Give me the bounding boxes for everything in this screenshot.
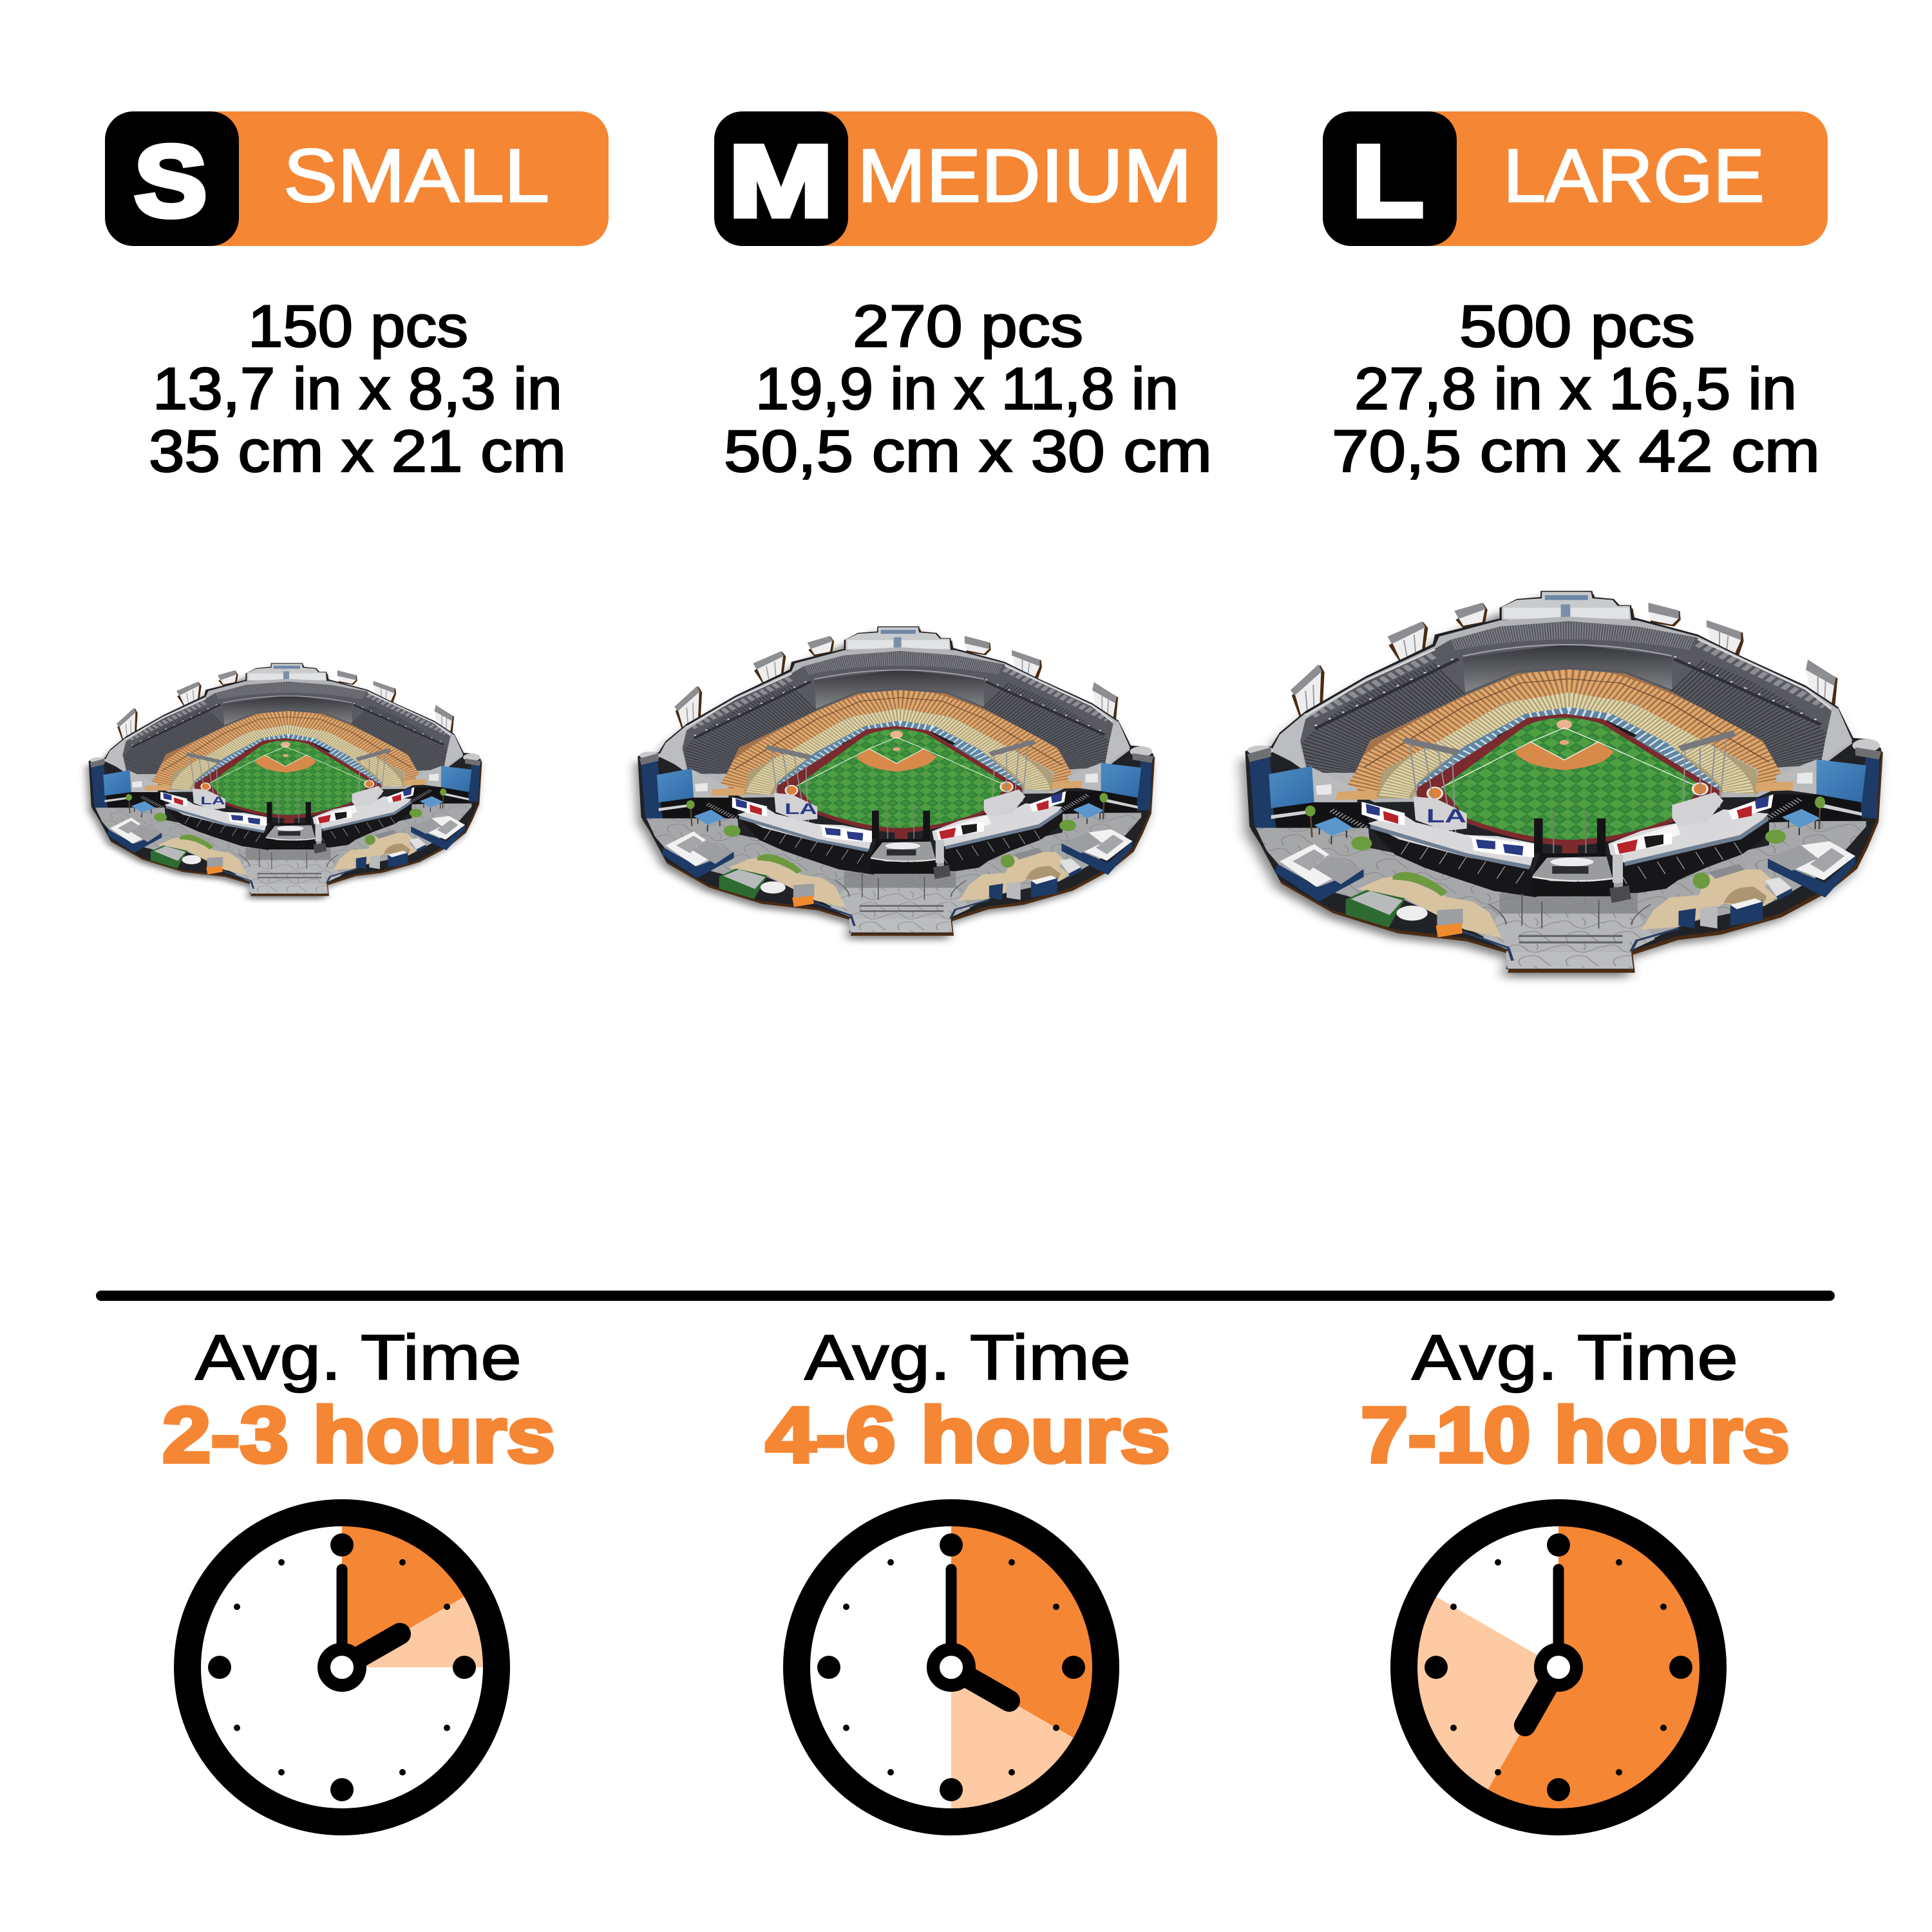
specifications: small: 150 pcs [248, 294, 468, 359]
average time: medium [766, 1321, 1170, 1479]
specifications: small [149, 294, 566, 484]
size badge: medium [714, 111, 1217, 246]
clock: 7-10 hours [1404, 1513, 1713, 1822]
specifications: medium: 19,9 in x 11,8 in [755, 356, 1179, 422]
specifications: large: 70,5 cm x 42 cm [1332, 419, 1820, 484]
specifications: medium [724, 294, 1212, 484]
badge label LARGE: LARGE [1503, 133, 1765, 218]
average time: large [1361, 1321, 1790, 1479]
duration: 7-10 hours: 7-10 hours [1361, 1391, 1790, 1479]
duration: 2-3 hours: 2-3 hours [162, 1391, 555, 1479]
badge label MEDIUM: MEDIUM [857, 133, 1192, 218]
specifications: large: 27,8 in x 16,5 in [1354, 356, 1797, 422]
badge letter M: M [729, 126, 833, 238]
average time: small: Avg. Time [195, 1321, 522, 1393]
stadium puzzle: large [1242, 591, 1883, 978]
clock: 2-3 hours [187, 1513, 497, 1822]
size badge: small [105, 111, 609, 246]
specifications: large [1332, 294, 1820, 484]
clock: 4-6 hours [797, 1513, 1106, 1822]
badge letter L: L [1352, 126, 1423, 238]
specifications: medium: 50,5 cm x 30 cm [724, 419, 1212, 484]
stadium puzzle: large: LA [1426, 806, 1466, 827]
stadium puzzle: small: LA [200, 794, 225, 807]
duration: 4-6 hours: 4-6 hours [766, 1391, 1170, 1479]
average time: medium: Avg. Time [804, 1321, 1131, 1393]
size badge: large [1323, 111, 1828, 246]
specifications: large: 500 pcs [1459, 294, 1695, 359]
stadium puzzle: small [86, 663, 482, 899]
specifications: small: 35 cm x 21 cm [149, 419, 566, 484]
average time: small [162, 1321, 555, 1479]
stadium puzzle: medium: LA [784, 800, 817, 817]
specifications: small: 13,7 in x 8,3 in [153, 356, 562, 422]
average time: large: Avg. Time [1412, 1321, 1738, 1393]
divider line [96, 1291, 1835, 1301]
stadium puzzle: medium [635, 627, 1155, 940]
badge letter S: S [135, 126, 207, 238]
specifications: medium: 270 pcs [853, 294, 1083, 359]
badge label SMALL: SMALL [283, 133, 549, 218]
